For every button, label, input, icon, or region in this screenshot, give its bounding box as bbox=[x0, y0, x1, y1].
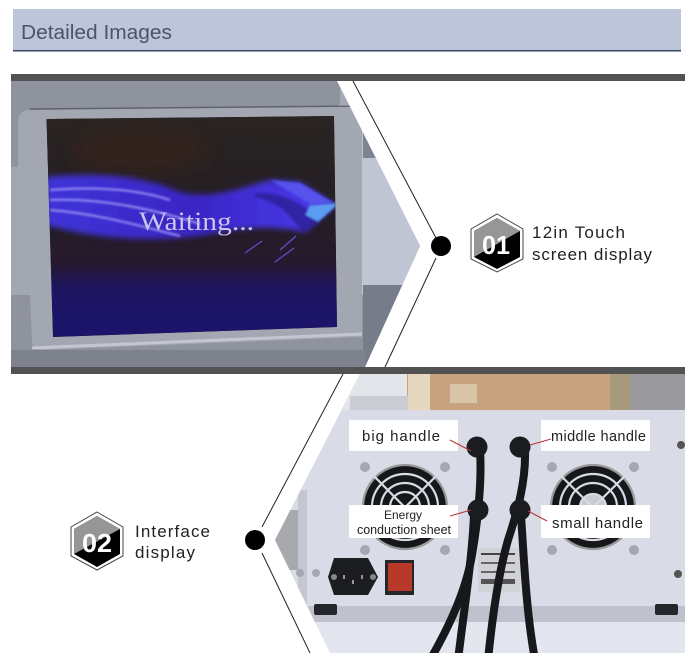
red power switch bbox=[385, 560, 414, 595]
connector lines and dot 02 bbox=[245, 374, 343, 653]
label: 12in Touch screen display: screen display bbox=[532, 245, 652, 264]
label: Interface display bbox=[135, 522, 210, 562]
label plate bbox=[478, 548, 520, 592]
fan left bbox=[363, 465, 447, 549]
icon: hexagon 02: 02 bbox=[82, 528, 112, 558]
cable connectors bbox=[466, 436, 530, 520]
screen text: Waiting... bbox=[139, 207, 254, 236]
photo: interface panel bbox=[270, 374, 690, 653]
label: Interface display: display bbox=[135, 543, 196, 562]
label: big handle: big handle bbox=[362, 428, 440, 445]
fan right bbox=[551, 465, 635, 549]
label: big handle bbox=[349, 420, 471, 451]
photo: touch screen bbox=[11, 81, 431, 367]
cables bbox=[430, 450, 535, 653]
label: Energy conduction sheet: conduction sheet bbox=[357, 523, 452, 537]
label: Energy conduction sheet bbox=[349, 505, 471, 538]
icon: hexagon 01 bbox=[471, 214, 523, 272]
touch screen display bbox=[46, 116, 337, 337]
icon: hexagon 02 bbox=[71, 512, 123, 570]
label: middle handle: middle handle bbox=[551, 429, 646, 445]
label: small handle: small handle bbox=[552, 515, 643, 532]
power socket bbox=[328, 558, 378, 595]
icon: hexagon 01: 01 bbox=[482, 230, 510, 260]
divider bar top bbox=[11, 74, 685, 81]
divider bar bottom bbox=[11, 367, 685, 374]
heading: Detailed Images bbox=[21, 22, 172, 44]
connector lines and dot 01 bbox=[353, 81, 451, 367]
label: 12in Touch screen display bbox=[532, 223, 652, 264]
label: Energy conduction sheet: Energy bbox=[384, 508, 422, 522]
label: Interface display: Interface bbox=[135, 522, 210, 541]
label: 12in Touch screen display: 12in Touch bbox=[532, 223, 625, 242]
label: small handle bbox=[528, 505, 650, 538]
label: middle handle bbox=[530, 420, 650, 451]
screws bbox=[296, 441, 685, 578]
header band bbox=[13, 9, 681, 52]
